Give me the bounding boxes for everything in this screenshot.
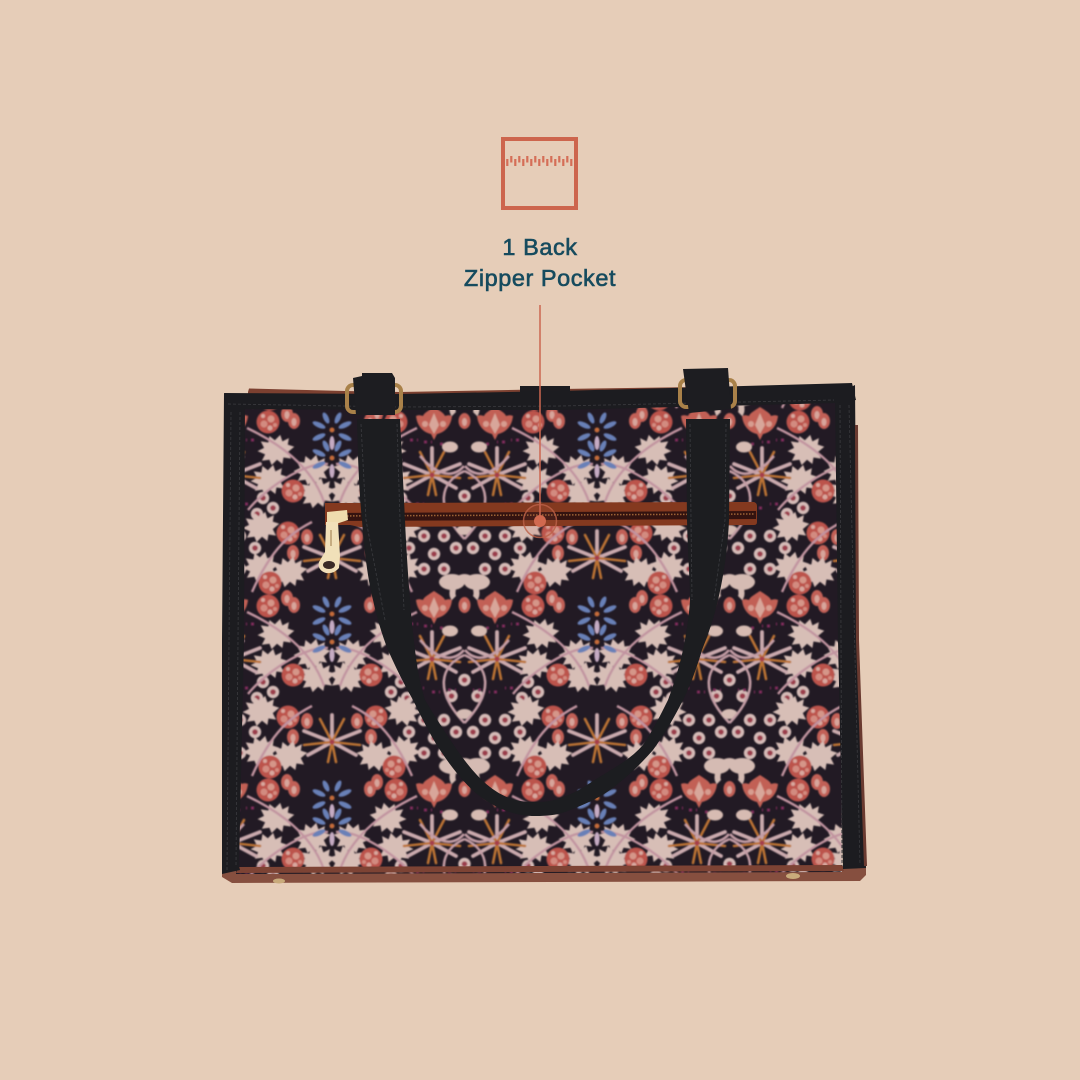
fabric lower edge <box>236 865 844 873</box>
feet <box>273 873 800 884</box>
zipper tape <box>325 502 757 527</box>
heading: 1 Back Zipper Pocket: 1 Back <box>502 234 578 260</box>
zipper pull <box>319 510 348 573</box>
right strap tab <box>683 368 731 413</box>
right black side band <box>835 385 866 869</box>
fabric panel with floral pattern <box>236 403 842 874</box>
black top band <box>224 383 856 410</box>
callout: target marker <box>524 504 556 538</box>
heading: 1 Back Zipper Pocket: Zipper Pocket <box>464 265 616 291</box>
right buckle ring <box>680 380 735 407</box>
top tab <box>520 386 570 394</box>
left black side band <box>222 394 245 874</box>
shoulder strap curve <box>357 419 730 816</box>
strap stitching <box>361 424 726 620</box>
zipper teeth highlights <box>338 514 755 516</box>
brown base <box>222 866 866 883</box>
right brown edge <box>855 425 867 866</box>
callout: leader line <box>539 305 541 521</box>
left buckle ring <box>347 385 401 412</box>
bag back brown top edge <box>248 387 700 395</box>
heading: 1 Back Zipper Pocket <box>464 234 616 291</box>
icon: back pocket square with zipper <box>503 139 576 208</box>
zipper teeth <box>335 511 756 521</box>
handbag <box>222 368 867 884</box>
band stitching <box>227 400 860 870</box>
left strap tab <box>353 373 395 415</box>
